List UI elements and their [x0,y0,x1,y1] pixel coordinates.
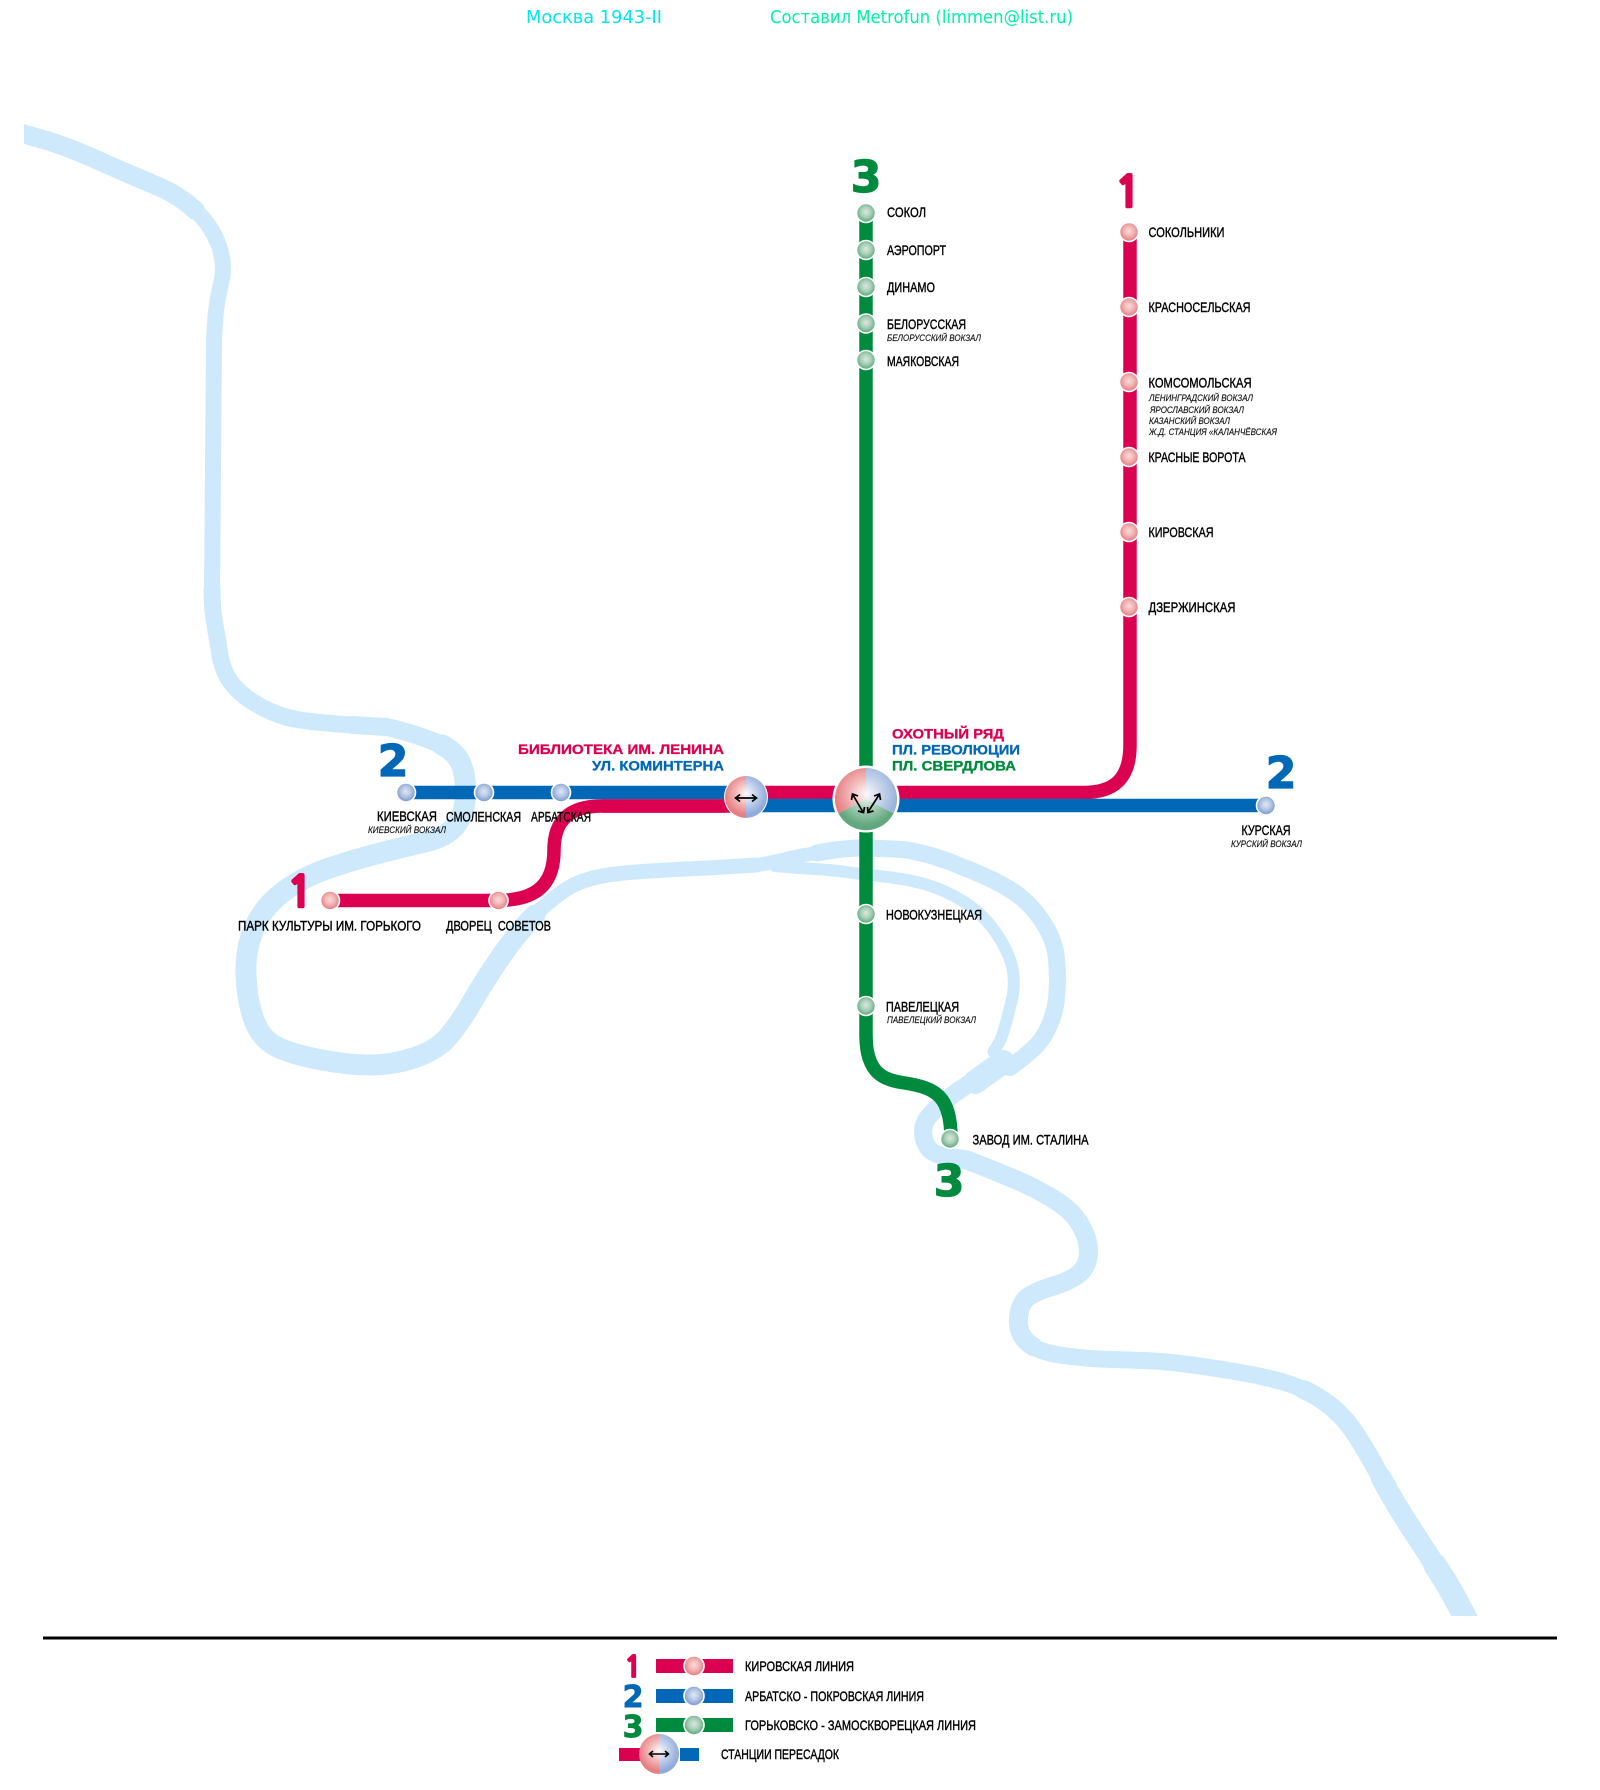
line number 2 left: 2 [378,736,408,787]
interchange labels: Biblioteka / Kominterna: УЛ. КОМИНТЕРНА [592,758,724,774]
legend row: interchange stations: СТАНЦИИ ПЕРЕСАДОК [721,1746,840,1762]
station: Kievskaya [368,783,447,835]
station: Komsomolskaya: Ж.Д. СТАНЦИЯ «КАЛАНЧЁВСКАЯ [1148,427,1278,437]
interchange station: central three-line hub [832,766,900,832]
line number 2 right: 2 [1266,748,1296,799]
line number 1 left: 1 [287,872,313,914]
interchange labels: Biblioteka / Kominterna: БИБЛИОТЕКА ИМ. ЛЕНИНА [518,741,724,757]
station: Kurskaya: КУРСКАЯ [1242,822,1290,838]
metro line 2 (blue) [406,792,1266,806]
legend row: Kirovskaya line [624,1654,854,1682]
station: Paveletskaya: ПАВЕЛЕЦКАЯ [886,998,959,1014]
legend row: Arbatsko-Pokrovskaya line: АРБАТСКО - ПОКРОВСКАЯ ЛИНИЯ [745,1688,924,1704]
station: Sokol [856,204,926,222]
station: Dvorets Sovetov [446,891,551,934]
station: Sokolniki [1120,222,1224,242]
station: Belorusskaya: БЕЛОРУССКАЯ [887,316,966,332]
station: Paveletskaya [856,996,977,1025]
station: Novokuznetskaya [856,904,982,924]
station: Novokuznetskaya: НОВОКУЗНЕЦКАЯ [886,906,982,922]
legend row: interchange stations [619,1734,840,1774]
station: Park Kultury [238,891,421,934]
station: Aeroport: АЭРОПОРТ [887,242,946,258]
station: Dinamo [856,278,935,296]
station: Dinamo: ДИНАМО [887,279,935,295]
station: Krasnye Vorota: КРАСНЫЕ ВОРОТА [1148,449,1246,465]
line number 3 bottom: 3 [934,1156,964,1207]
station: Belorusskaya [856,314,982,343]
station: Zavod im. Stalina [940,1130,1089,1148]
station: Kurskaya [1231,796,1303,849]
legend row: Gorkovsko-Zamoskvoretskaya line [623,1710,976,1745]
legend row: Kirovskaya line: 1 [624,1654,642,1682]
interchange station: Biblioteka [724,775,768,819]
legend row: Gorkovsko-Zamoskvoretskaya line: ГОРЬКОВСКО - ЗАМОСКВОРЕЦКАЯ ЛИНИЯ [745,1717,976,1733]
station: Aeroport [856,240,946,260]
station: Dzerzhinskaya [1120,598,1236,616]
station: Krasnye Vorota [1120,448,1246,466]
station: Komsomolskaya [1120,372,1278,437]
station: Komsomolskaya: КОМСОМОЛЬСКАЯ [1148,374,1252,390]
station: Dvorets Sovetov: ДВОРЕЦ СОВЕТОВ [446,918,551,934]
station: Krasnoselskaya: КРАСНОСЕЛЬСКАЯ [1148,299,1250,315]
station: Kirovskaya: КИРОВСКАЯ [1148,524,1214,540]
station: Komsomolskaya: ЛЕНИНГРАДСКИЙ ВОКЗАЛ [1148,392,1254,403]
station: Kievskaya: КИЕВСКАЯ [377,808,437,824]
station: Belorusskaya: БЕЛОРУССКИЙ ВОКЗАЛ [887,332,982,343]
legend row: Arbatsko-Pokrovskaya line [623,1680,924,1715]
legend [619,1654,976,1774]
station: Mayakovskaya [856,350,959,370]
station: Arbatskaya [531,783,591,824]
station: Smolenskaya: СМОЛЕНСКАЯ [446,808,521,824]
legend row: Gorkovsko-Zamoskvoretskaya line: 3 [623,1710,643,1745]
river: Moskva [10,130,1474,1634]
station: Mayakovskaya: МАЯКОВСКАЯ [887,353,959,369]
metro line 3 (green) [866,213,951,1139]
red line section under Biblioteka label [602,799,725,813]
station: Komsomolskaya: ЯРОСЛАВСКИЙ ВОКЗАЛ [1149,404,1245,415]
station: Sokol: СОКОЛ [887,204,926,220]
station: Kievskaya: КИЕВСКИЙ ВОКЗАЛ [368,824,447,835]
station: Krasnoselskaya [1120,298,1250,316]
credit: compiled by Metrofun: Составил Metrofun (limmen@list.ru) [770,7,1073,28]
station: Park Kultury: ПАРК КУЛЬТУРЫ ИМ. ГОРЬКОГО [238,918,421,934]
station: Komsomolskaya: КАЗАНСКИЙ ВОКЗАЛ [1149,415,1231,426]
interchange labels: Biblioteka / Kominterna [518,741,724,774]
line number 1 top: 1 [1115,172,1141,214]
interchange labels: Okhotny Ryad / Revolyutsii / Sverdlova: ОХОТНЫЙ РЯД [892,724,1004,742]
legend row: Arbatsko-Pokrovskaya line: 2 [623,1680,643,1715]
station: Paveletskaya: ПАВЕЛЕЦКИЙ ВОКЗАЛ [887,1014,977,1025]
station: Kurskaya: КУРСКИЙ ВОКЗАЛ [1231,838,1303,849]
station: Arbatskaya: АРБАТСКАЯ [531,808,591,824]
station: Kirovskaya [1120,522,1214,542]
divider line [43,1636,1557,1640]
interchange labels: Okhotny Ryad / Revolyutsii / Sverdlova: ПЛ. СВЕРДЛОВА [892,758,1016,774]
station: Smolenskaya [446,783,521,824]
station: Zavod im. Stalina: ЗАВОД ИМ. СТАЛИНА [972,1132,1089,1148]
station: Dzerzhinskaya: ДЗЕРЖИНСКАЯ [1148,599,1236,615]
station: Sokolniki: СОКОЛЬНИКИ [1148,224,1224,240]
line number 3 top: 3 [851,152,881,203]
title: Moscow 1943-II: Москва 1943-II [526,7,662,28]
interchange labels: Okhotny Ryad / Revolyutsii / Sverdlova [892,724,1020,774]
legend row: Kirovskaya line: КИРОВСКАЯ ЛИНИЯ [745,1658,854,1674]
metro line 1 (red) [330,232,1130,900]
interchange labels: Okhotny Ryad / Revolyutsii / Sverdlova: ПЛ. РЕВОЛЮЦИИ [892,742,1020,758]
